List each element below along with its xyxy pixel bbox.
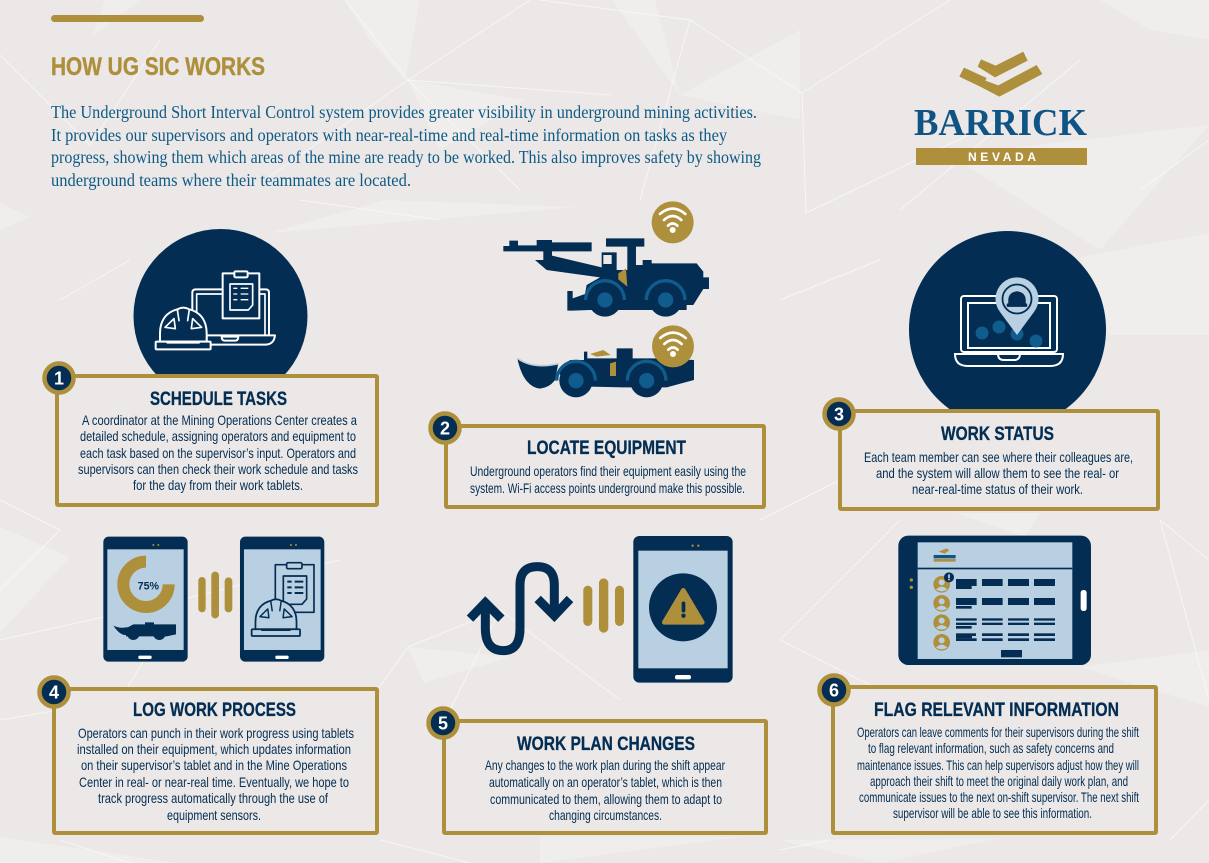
body text: Underground operators find their equipment easily using the [470, 463, 746, 479]
heading: WORK PLAN CHANGES [517, 734, 695, 755]
body text: to flag relevant information, such as safety concerns and [868, 740, 1114, 756]
panel: 1 schedule tasks [44, 364, 377, 505]
icon: Barrick chevrons [959, 52, 1042, 97]
badge 2 [430, 414, 460, 442]
heading: LOG WORK PROCESS [133, 700, 296, 721]
panel: 6 flag relevant information [820, 676, 1156, 833]
icon: tablet with clipboard and helmet [240, 537, 324, 662]
icon: drill rig and loader with wifi [503, 201, 709, 397]
icon: signal bars [198, 572, 232, 618]
body text [470, 463, 746, 496]
icon: signal bars [583, 578, 624, 633]
body text: each task based on the supervisor’s input. Operators and [80, 445, 356, 461]
body text: Operators can punch in their work progress using tablets [78, 725, 354, 741]
body text: Any changes to the work plan during the shift appear [485, 757, 725, 773]
wordmark: BARRICK [914, 102, 1087, 144]
body text: Each team member can see where their colleagues are, [864, 449, 1133, 465]
body text: supervisor will be able to see this information. [893, 805, 1092, 821]
body text: communicated to them, allowing them to adapt to [490, 791, 722, 807]
body text: and the system will allow them to see the real- or [876, 465, 1119, 481]
icon: tablet with 75% gauge: 75% [138, 581, 160, 593]
body text: automatically on an operator’s tablet, which is then [489, 774, 722, 790]
intro paragraph: underground teams where their teammates are located. [51, 170, 411, 190]
Nevada label: NEVADA [968, 150, 1036, 164]
panel: 5 work plan changes [428, 708, 766, 833]
icon: winding arrow [470, 567, 570, 651]
icon: landscape tablet with dashboard [898, 536, 1091, 665]
icon: plan change arrow and alert tablet [470, 536, 733, 683]
icon: drill rig [503, 238, 709, 317]
intro paragraph [51, 102, 761, 190]
heading: WORK STATUS [941, 424, 1054, 445]
icon: wifi badge bottom [652, 325, 694, 367]
intro paragraph: progress, showing them which areas of the mine are ready to be worked. This also improves safety by showing [51, 147, 761, 167]
body text [485, 757, 725, 823]
badge 6: 6 [829, 680, 839, 700]
icon: mini logo [934, 548, 956, 562]
badge 3 [824, 400, 854, 428]
body text: supervisors can then check their work schedule and tasks [78, 461, 358, 477]
badge 6 [820, 676, 848, 704]
heading: SCHEDULE TASKS [150, 389, 287, 410]
heading: FLAG RELEVANT INFORMATION [874, 700, 1119, 721]
heading: LOCATE EQUIPMENT [527, 438, 686, 459]
intro paragraph: The Underground Short Interval Control system provides greater visibility in underground mining activities. [51, 102, 757, 122]
body text [77, 725, 354, 823]
table rows [956, 579, 1055, 657]
logo: Barrick Nevada [914, 52, 1087, 165]
body text: A coordinator at the Mining Operations Center creates a [82, 412, 357, 428]
body text: near-real-time status of their work. [912, 481, 1083, 497]
badge 5: 5 [438, 714, 448, 734]
icon: progress tablets [103, 537, 324, 662]
body text: system. Wi-Fi access points underground make this possible. [470, 480, 745, 496]
badge 3: 3 [834, 404, 844, 424]
body text [857, 724, 1139, 821]
body text [864, 449, 1133, 497]
icon: loader [517, 348, 694, 397]
body text: detailed schedule, assigning operators and equipment to [80, 428, 356, 444]
icon: tablet with 75% gauge [103, 537, 188, 662]
body text [78, 412, 358, 493]
badge 1: 1 [54, 368, 64, 388]
icon: work status circle with laptop and location pin [909, 231, 1106, 428]
notification [944, 572, 954, 582]
panel: 3 work status [824, 400, 1158, 509]
icon: schedule circle with laptop, clipboard and helmet [134, 229, 308, 403]
body text: installed on their equipment, which updates information [77, 741, 351, 757]
body text: for the day from their work tablets. [133, 477, 303, 493]
intro paragraph: It provides our supervisors and operators with near-real-time and real-time information on tasks as they [51, 125, 727, 145]
badge 4 [40, 678, 68, 706]
panel: 2 locate equipment [430, 414, 764, 507]
badge 1 [44, 364, 74, 392]
body text: track progress automatically through the use of [98, 790, 328, 806]
badge 4: 4 [49, 682, 59, 702]
body text: on their supervisor’s tablet and in the Mine Operations [81, 757, 347, 773]
icon: tablet with warning [633, 536, 733, 683]
body text: changing circumstances. [549, 807, 662, 823]
badge 2: 2 [440, 418, 450, 438]
body text: equipment sensors. [167, 807, 261, 823]
icon: location pin [996, 277, 1038, 335]
body text: Center in real- or near-real time. Eventually, we hope to [79, 774, 349, 790]
title: HOW UG SIC WORKS [51, 53, 265, 81]
top accent bar [51, 15, 204, 22]
icon: wifi badge top [652, 201, 694, 243]
badge 5 [428, 708, 458, 738]
Nevada band [916, 148, 1087, 165]
panel: 4 log work process [40, 678, 377, 833]
avatars [933, 576, 950, 651]
